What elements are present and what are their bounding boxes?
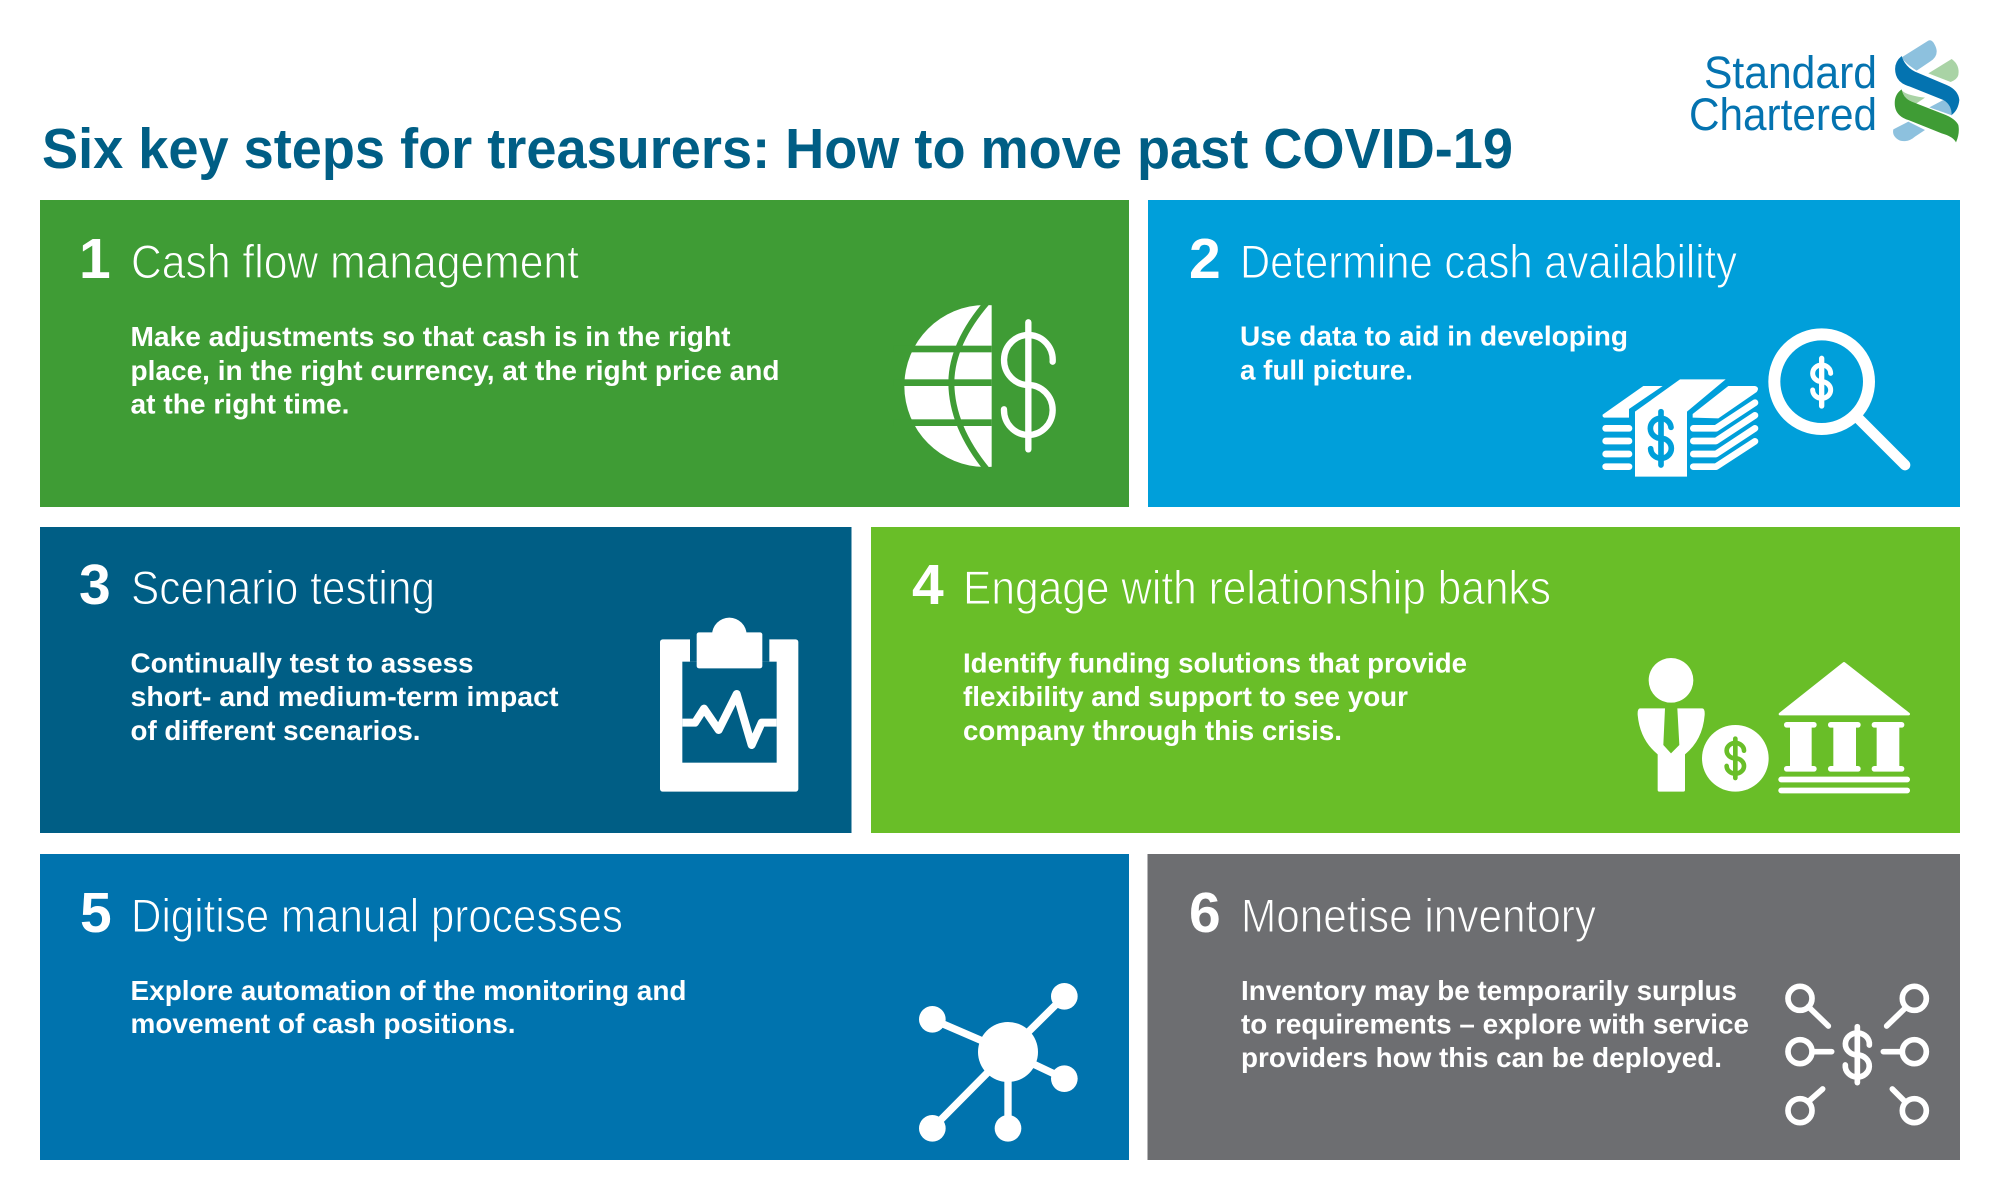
panel 3 body: short- and medium-term impact — [130, 681, 558, 712]
panel 4 background — [871, 527, 1960, 833]
panel 6 background — [1148, 854, 1960, 1160]
panel 4 body: company through this crisis. — [963, 715, 1342, 746]
panel 6 number: 6 — [1189, 881, 1221, 945]
panel 2 heading: Determine cash availability — [1240, 235, 1737, 288]
panel 2 number: 2 — [1189, 227, 1221, 291]
panel 5 body: movement of cash positions. — [130, 1008, 516, 1039]
coin — [1702, 725, 1769, 792]
logo wordmark: Standard — [1704, 47, 1877, 98]
panel 3 body — [130, 648, 558, 746]
logo: Standard Chartered — [1689, 40, 1959, 142]
icon: globe with dollar — [904, 305, 1056, 467]
panel 6 body: Inventory may be temporarily surplus — [1241, 975, 1737, 1006]
panel 5 background — [40, 854, 1129, 1160]
panel 5 heading: Digitise manual processes — [131, 889, 623, 942]
logo wordmark — [1689, 47, 1877, 140]
panel 4 body: Identify funding solutions that provide — [963, 648, 1467, 678]
logo mark — [1893, 40, 1959, 142]
panel 1 background — [40, 200, 1129, 507]
panel 4 body: flexibility and support to see your — [963, 681, 1408, 712]
panel 6: monetise inventory — [1148, 854, 1960, 1160]
banknotes — [1603, 379, 1758, 477]
title: Six key steps for treasurers: How to move past COVID-19 — [42, 117, 1513, 181]
panel 1 body: at the right time. — [130, 388, 350, 420]
panel 4 heading: Engage with relationship banks — [963, 561, 1551, 614]
magnifier — [1774, 334, 1905, 465]
panel 1 number: 1 — [79, 227, 111, 291]
panel 3 heading: Scenario testing — [131, 561, 435, 614]
panel 5 number: 5 — [80, 881, 112, 945]
panel 6 heading: Monetise inventory — [1241, 889, 1596, 942]
icon: clipboard with chart — [660, 618, 798, 792]
panel 3 body: of different scenarios. — [130, 715, 420, 746]
logo wordmark: Chartered — [1689, 89, 1877, 140]
icon: dollar with connected nodes — [1788, 986, 1926, 1123]
panel 1: cash flow management — [40, 200, 1129, 507]
panel 6 body: to requirements – explore with service — [1241, 1008, 1749, 1040]
panel 4: engage with relationship banks — [871, 527, 1960, 833]
panel 2: determine cash availability — [1148, 200, 1960, 507]
bank — [1780, 663, 1909, 714]
panel 1 heading: Cash flow management — [131, 235, 579, 288]
panel 3 number: 3 — [79, 553, 111, 617]
panel 3 background — [40, 527, 852, 833]
panel 4 number: 4 — [912, 553, 944, 617]
panel 3: scenario testing — [40, 527, 852, 833]
panel 2 body: a full picture. — [1240, 354, 1413, 386]
panel 2 body: Use data to aid in developing — [1240, 320, 1628, 352]
panel 4 body — [963, 648, 1467, 746]
panel 5: digitise manual processes — [40, 854, 1129, 1160]
icon: cash stack and magnifier — [1603, 334, 1905, 477]
panel 1 body — [130, 321, 779, 420]
panel 3 body: Continually test to assess — [130, 648, 474, 678]
panel 5 body: Explore automation of the monitoring and — [130, 975, 686, 1006]
panel 2 body — [1240, 320, 1628, 386]
panel 2 background — [1148, 200, 1960, 507]
panel 1 body: Make adjustments so that cash is in the right — [130, 321, 730, 352]
person — [1649, 658, 1693, 703]
icon: network hub — [919, 983, 1078, 1142]
icon: banker, coin and bank — [1638, 658, 1910, 793]
panel 1 body: place, in the right currency, at the right price and — [130, 355, 779, 386]
panel 5 body — [130, 975, 686, 1039]
panel 6 body: providers how this can be deployed. — [1241, 1042, 1722, 1073]
panel 6 body — [1241, 975, 1749, 1073]
